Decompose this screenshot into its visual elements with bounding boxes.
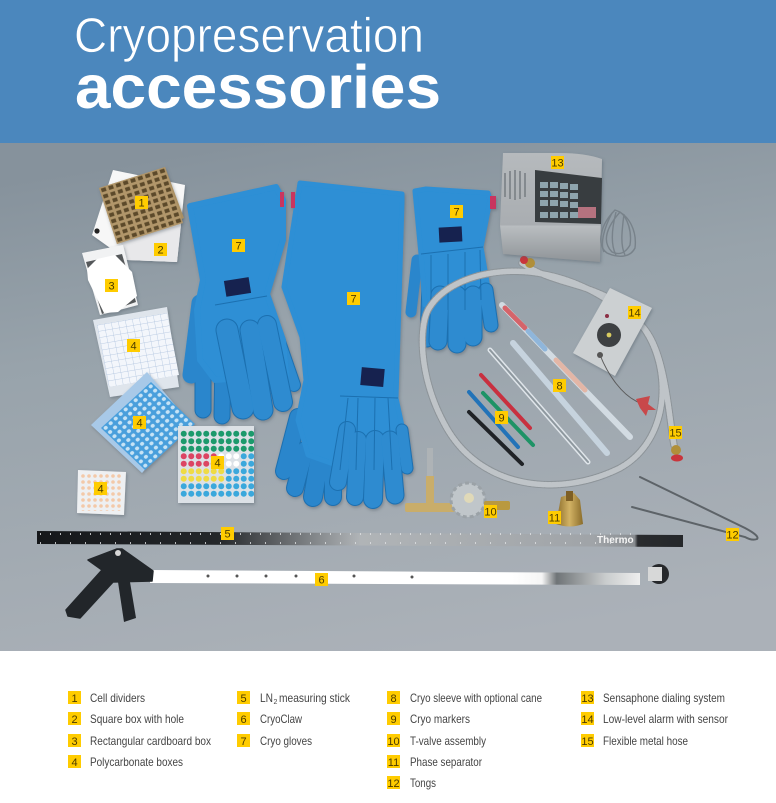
number marker 1: [135, 196, 148, 210]
legend item 4: 4: [71, 757, 78, 769]
number marker 11: 11: [549, 512, 560, 524]
legend item 11: 11: [388, 757, 399, 769]
legend item 6: 6: [240, 714, 247, 726]
cryo sleeve with optional cane: [490, 305, 630, 462]
legend item 9: Cryo markers: [410, 712, 470, 726]
number marker 4 blue box: 4: [136, 418, 143, 430]
tongs: [632, 477, 758, 540]
cryo markers: [469, 375, 533, 464]
number marker 4 small box: 4: [97, 484, 104, 496]
number marker 8: [553, 379, 566, 392]
polycarbonate box white: [93, 307, 179, 397]
number marker 9: [495, 411, 508, 424]
legend item 13: 13: [581, 693, 594, 705]
sensaphone dialing system: [500, 153, 602, 262]
legend item 5: 2: [274, 699, 278, 706]
legend item 6: [237, 712, 302, 726]
number marker 2: [154, 243, 167, 256]
LN2 measuring stick: Thermo: [597, 535, 634, 546]
number marker 7 left glove: [232, 239, 245, 252]
legend item 13: Sensaphone dialing system: [603, 691, 725, 705]
legend item 10: [387, 734, 486, 748]
legend item 11: [387, 755, 482, 769]
legend item 15: Flexible metal hose: [603, 734, 688, 748]
number marker 4 small box: [94, 482, 107, 496]
cryo glove large: [284, 183, 407, 499]
number marker 7 small glove: 7: [453, 206, 460, 218]
hose fittings: [520, 256, 683, 462]
number marker 4 coloured box: 4: [214, 458, 221, 470]
legend: [68, 691, 728, 790]
number marker 10: 10: [484, 506, 497, 518]
number marker 2: 2: [157, 244, 164, 256]
legend item 7: 7: [240, 736, 247, 748]
number marker 7 left glove: 7: [235, 240, 242, 252]
legend item 9: 9: [390, 714, 397, 726]
header band: [0, 0, 776, 143]
number marker 3: [105, 279, 118, 292]
number marker 4 coloured box: [211, 456, 224, 470]
polycarbonate box blue: [91, 372, 195, 473]
LN2 measuring stick: [37, 531, 683, 547]
number marker 4 blue box: [133, 416, 146, 430]
legend item 4: [68, 755, 183, 769]
number marker 7 small glove: [450, 205, 463, 218]
number marker 7 large glove: [347, 292, 360, 306]
legend item 15: [581, 734, 688, 748]
number marker 14: 14: [628, 308, 641, 320]
legend item 4: Polycarbonate boxes: [90, 755, 183, 769]
legend item 5: LN: [260, 691, 273, 705]
coiled phone cable: [601, 210, 635, 256]
legend item 2: 2: [71, 714, 78, 726]
number marker 1: 1: [138, 198, 145, 210]
low-level alarm with sensor: [573, 288, 652, 376]
legend item 10: 10: [387, 736, 400, 748]
number marker 4 white box: 4: [130, 340, 137, 352]
legend item 5: measuring stick: [279, 691, 351, 705]
product photo panel: [0, 143, 776, 651]
polycarbonate box small: [77, 470, 126, 515]
legend item 3: 3: [71, 736, 78, 748]
number marker 8: 8: [556, 380, 563, 392]
legend item 14: 14: [581, 714, 594, 726]
t-valve assembly: [405, 448, 510, 517]
legend item 11: Phase separator: [410, 755, 482, 769]
legend item 8: 8: [390, 693, 397, 705]
square box with hole: [92, 170, 185, 262]
number marker 6: [315, 573, 328, 586]
flexible metal hose: [422, 263, 674, 485]
legend item 6: CryoClaw: [260, 712, 302, 726]
legend item 8: Cryo sleeve with optional cane: [410, 691, 542, 705]
CryoClaw: [66, 549, 669, 622]
legend item 7: Cryo gloves: [260, 734, 312, 748]
number marker 3: 3: [108, 280, 115, 292]
title: [74, 9, 441, 121]
claw handle: [66, 549, 153, 618]
number marker 5: 5: [224, 528, 231, 540]
number marker 5: [221, 527, 234, 540]
legend item 15: 15: [581, 736, 594, 748]
title: accessories: [75, 53, 441, 121]
cryo glove left: [190, 187, 294, 416]
number marker 13: 13: [551, 158, 564, 170]
cryo glove small: [411, 189, 496, 344]
legend item 1: [68, 691, 145, 705]
title: Cryopreservation: [74, 9, 424, 63]
number marker 4 white box: [127, 339, 140, 352]
phase separator: [556, 491, 583, 526]
legend item 12: 12: [387, 778, 400, 790]
legend item 12: [387, 776, 436, 790]
number marker 12: 12: [726, 530, 739, 542]
number marker 15: 15: [669, 428, 682, 440]
alarm sensor wire: [600, 355, 656, 416]
legend item 10: T-valve assembly: [410, 734, 486, 748]
legend item 5: 5: [240, 693, 247, 705]
legend item 3: Rectangular cardboard box: [90, 734, 211, 748]
number marker 7 large glove: 7: [350, 294, 357, 306]
number marker 6: 6: [318, 574, 325, 586]
polycarbonate box coloured: [178, 426, 254, 503]
legend item 1: Cell dividers: [90, 691, 145, 705]
legend item 5: [237, 691, 351, 706]
legend item 14: Low-level alarm with sensor: [603, 712, 728, 726]
legend item 12: Tongs: [410, 776, 436, 790]
rectangular cardboard box: [82, 245, 138, 315]
cell dividers: [99, 167, 184, 244]
legend item 2: Square box with hole: [90, 712, 184, 726]
legend item 7: [237, 734, 312, 748]
legend item 9: [387, 712, 470, 726]
number marker 9: 9: [498, 412, 505, 424]
legend item 1: 1: [71, 693, 78, 705]
